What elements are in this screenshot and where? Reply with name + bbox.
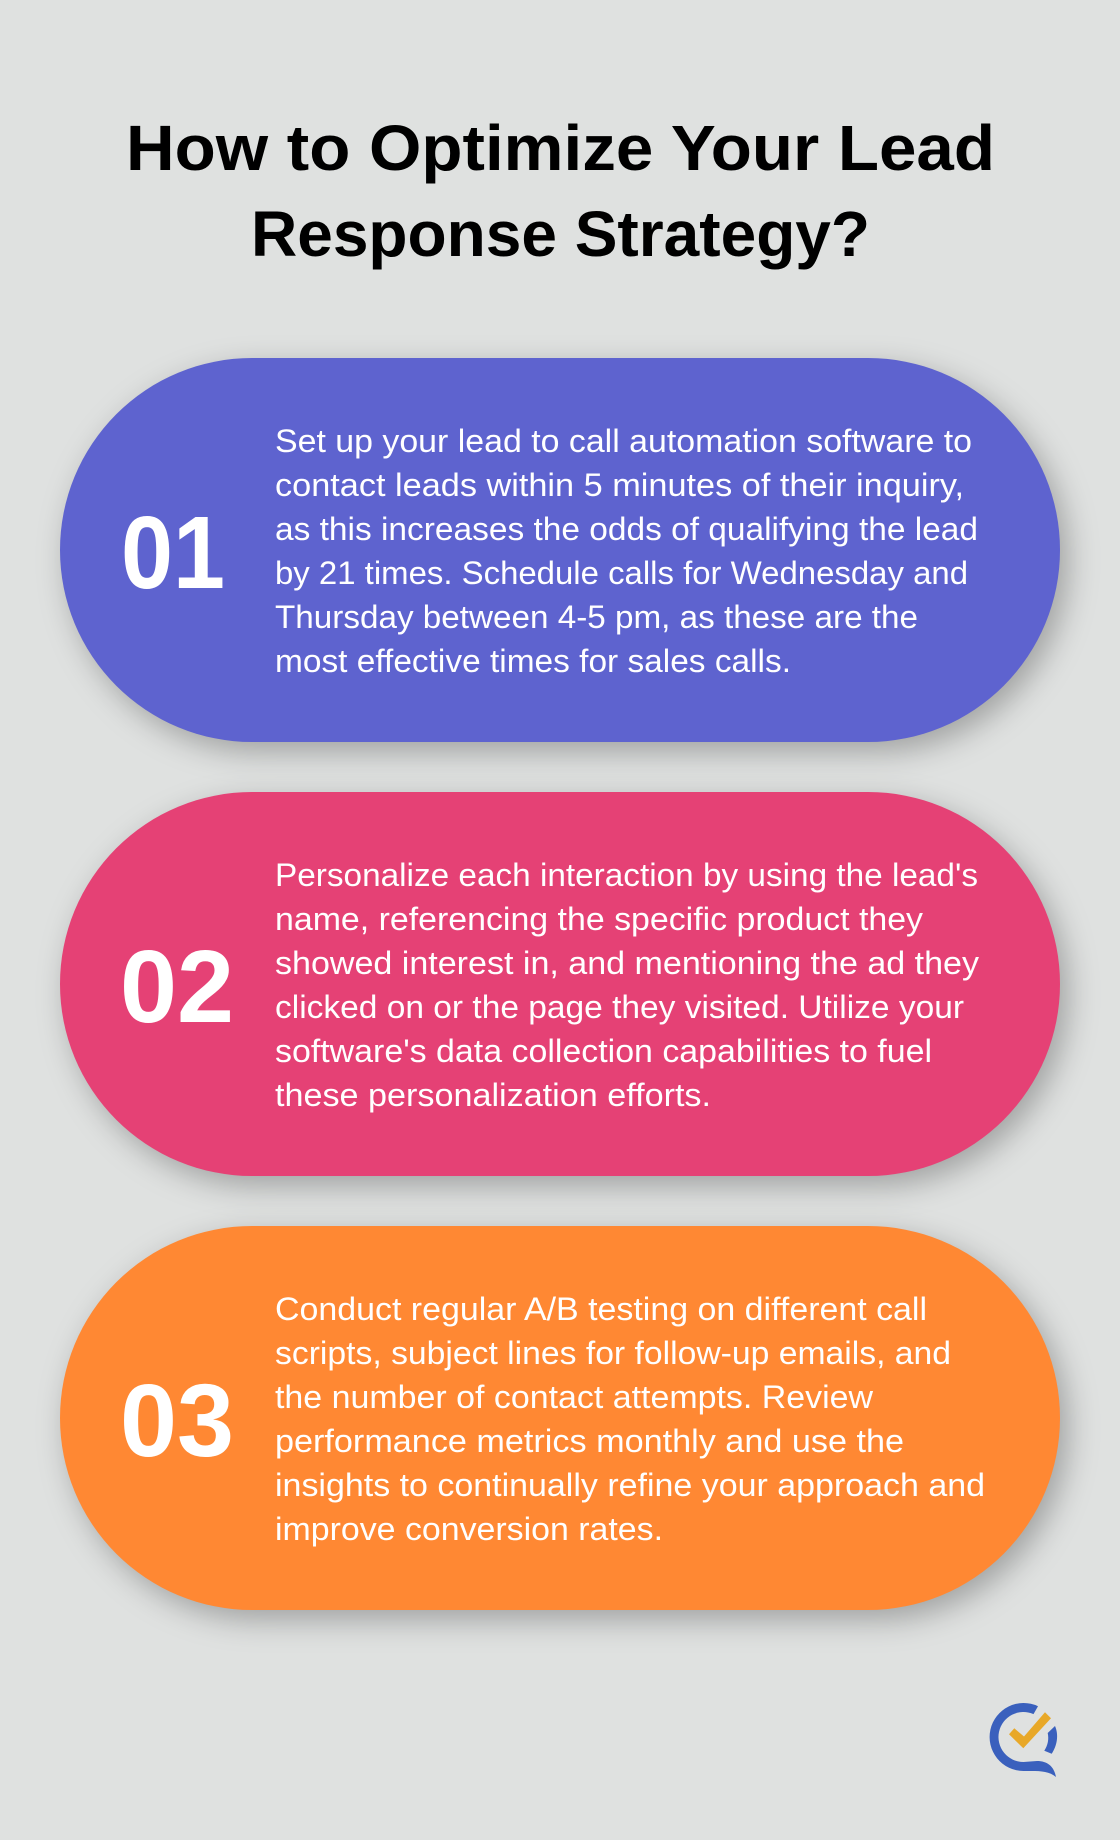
title: How to Optimize Your Lead bbox=[126, 112, 995, 184]
text block: step 03: improve conversion rates. bbox=[275, 1511, 663, 1547]
step number 01: 01 bbox=[121, 495, 225, 610]
step number 02: 02 bbox=[120, 929, 234, 1044]
text block: step 01: contact leads within 5 minutes of their inquiry, bbox=[275, 467, 964, 503]
text block: step 02: Personalize each interaction by using the lead's bbox=[275, 857, 978, 893]
text block: step 02: these personalization efforts. bbox=[275, 1077, 711, 1113]
text block: step 02: clicked on or the page they visited. Utilize your bbox=[275, 989, 964, 1025]
panel: step 03 bbox=[60, 1226, 1060, 1610]
pill background: purple bbox=[60, 358, 1060, 742]
text block: step 02 bbox=[275, 857, 979, 1113]
icon: logo speech bubble with check mark bbox=[990, 1703, 1057, 1777]
text block: step 02: software's data collection capabilities to fuel bbox=[275, 1033, 932, 1069]
text block: step 01: most effective times for sales calls. bbox=[275, 643, 791, 679]
pill background: orange bbox=[60, 1226, 1060, 1610]
title bbox=[126, 112, 995, 270]
text block: step 02: name, referencing the specific product they bbox=[275, 901, 923, 937]
text block: step 02: showed interest in, and mentioning the ad they bbox=[275, 945, 979, 981]
text block: step 01: by 21 times. Schedule calls for Wednesday and bbox=[275, 555, 968, 591]
title: Response Strategy? bbox=[251, 198, 870, 270]
text block: step 01: as this increases the odds of qualifying the lead bbox=[275, 511, 978, 547]
text block: step 03: insights to continually refine your approach and bbox=[275, 1467, 985, 1503]
panel: step 02 bbox=[60, 792, 1060, 1176]
step number 03: 03 bbox=[120, 1363, 234, 1478]
text block: step 03: scripts, subject lines for follow-up emails, and bbox=[275, 1335, 951, 1371]
text block: step 03: performance metrics monthly and use the bbox=[275, 1423, 904, 1459]
text block: step 01: Set up your lead to call automation software to bbox=[275, 423, 972, 459]
pill background: pink bbox=[60, 792, 1060, 1176]
text block: step 01: Thursday between 4-5 pm, as these are the bbox=[275, 599, 918, 635]
text block: step 03: Conduct regular A/B testing on different call bbox=[275, 1291, 927, 1327]
text block: step 03: the number of contact attempts. Review bbox=[275, 1379, 874, 1415]
text block: step 01 bbox=[275, 423, 978, 679]
panel: step 01 bbox=[60, 358, 1060, 742]
text block: step 03 bbox=[275, 1291, 985, 1547]
